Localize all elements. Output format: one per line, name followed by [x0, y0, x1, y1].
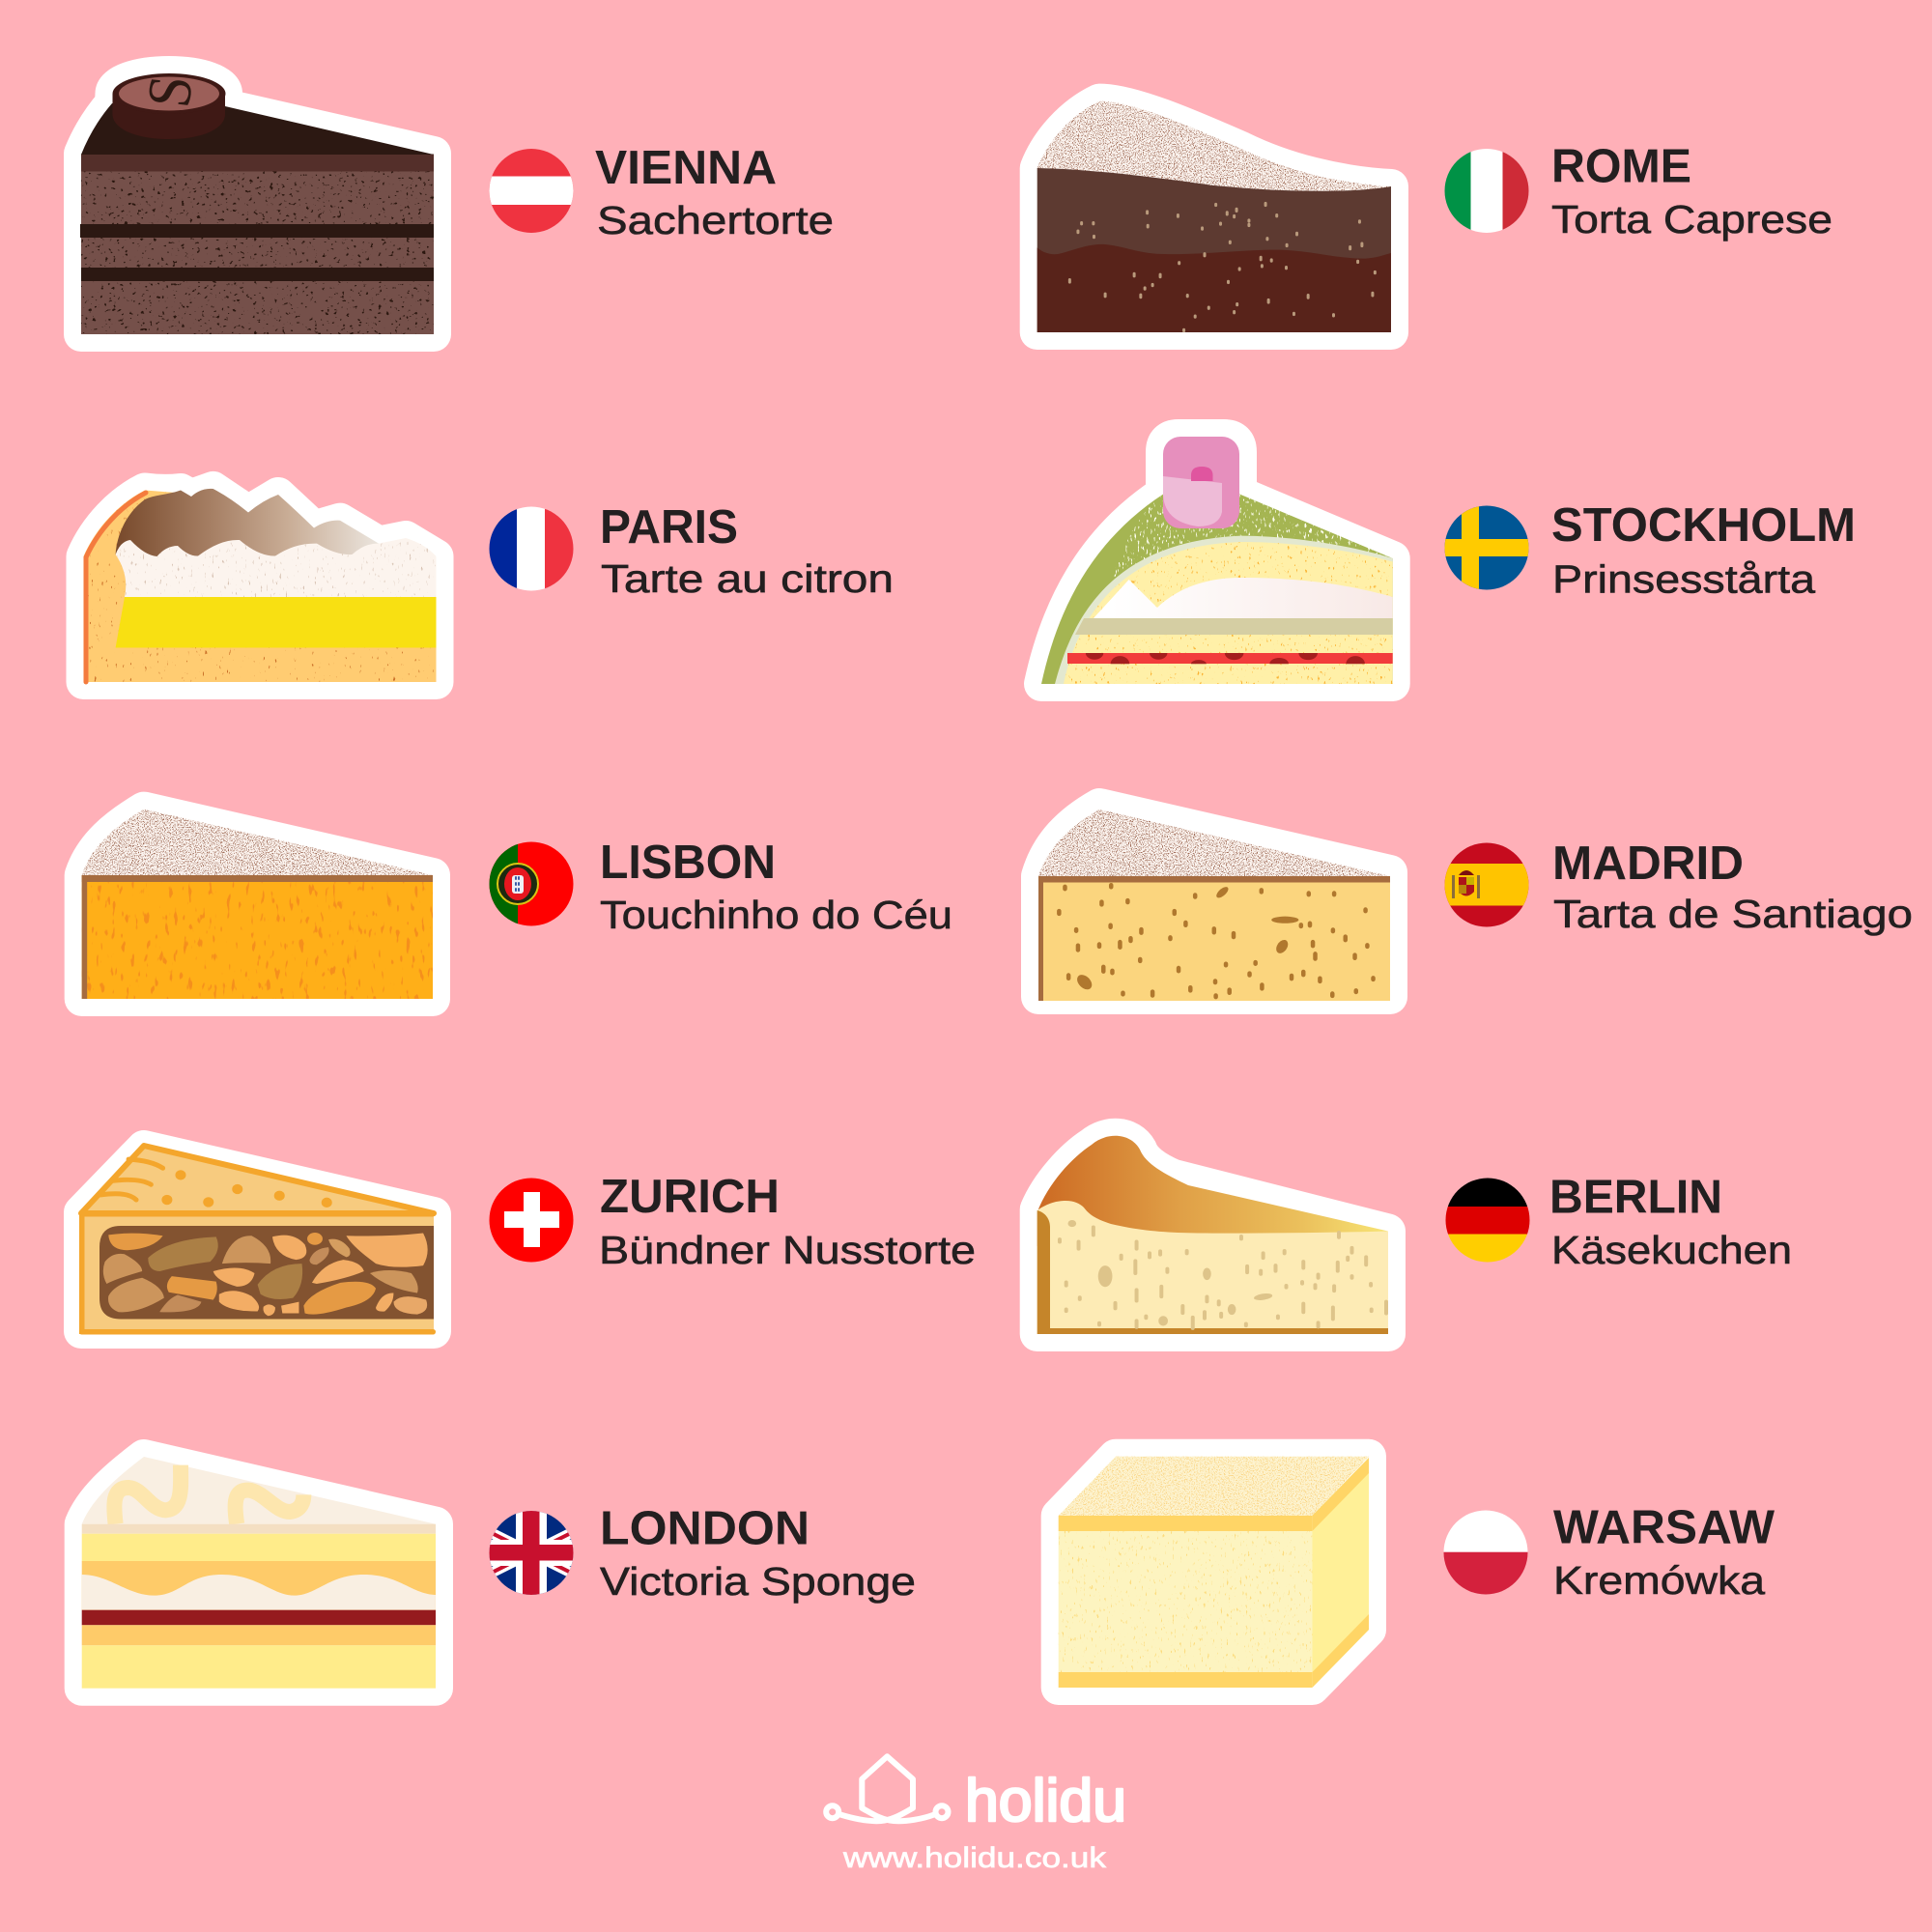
flag: United Kingdom: [489, 1511, 574, 1596]
flag: Switzerland: [489, 1178, 574, 1263]
cake name: Bündner Nusstorte: Bündner Nusstorte: [599, 1228, 976, 1272]
wordmark: holidu: [965, 1768, 1126, 1834]
panel: Paris: [83, 489, 894, 682]
heading: STOCKHOLM: STOCKHOLM: [1551, 499, 1856, 552]
flag: Portugal: [489, 841, 574, 926]
heading: LONDON: LONDON: [600, 1503, 810, 1555]
panel: Stockholm: [1041, 437, 1856, 684]
panel: Madrid: [1038, 806, 1913, 1001]
illustration: Touchinho do Céu slice: [82, 810, 433, 999]
flag: Sweden: [1444, 505, 1529, 590]
heading: ROME: ROME: [1551, 141, 1691, 193]
flag: Germany: [1445, 1178, 1530, 1264]
illustration: Käsekuchen slice: [1037, 1136, 1388, 1334]
heading: LISBON: LISBON: [600, 837, 776, 889]
panel: Berlin: [1037, 1136, 1792, 1334]
heading: BERLIN: BERLIN: [1549, 1171, 1722, 1223]
cake name: Torta Caprese: Torta Caprese: [1551, 197, 1833, 242]
panel: Zurich: [79, 1146, 976, 1335]
heading: MADRID: MADRID: [1552, 838, 1744, 890]
cake name: Victoria Sponge: Victoria Sponge: [600, 1559, 916, 1604]
illustration: Tarte au citron slice: [83, 489, 437, 682]
illustration: Sachertorte slice: S: [135, 72, 206, 110]
illustration: Victoria Sponge slice: [82, 1457, 436, 1689]
panel: Warsaw: [1059, 1457, 1776, 1688]
illustration: Tarta de Santiago slice: [1038, 806, 1390, 1001]
cake name: Kremówka: Kremówka: [1553, 1558, 1765, 1603]
cake name: Touchinho do Céu: Touchinho do Céu: [600, 893, 952, 937]
flag: Spain: [1444, 842, 1529, 927]
panel: Lisbon: [82, 810, 952, 999]
cake name: Käsekuchen: Käsekuchen: [1551, 1228, 1792, 1272]
website url: www.holidu.co.uk: [842, 1842, 1107, 1874]
illustration: Kremówka slice: [1059, 1457, 1369, 1688]
cake name: Sachertorte: Sachertorte: [597, 198, 834, 242]
illustration: Bündner Nusstorte slice: [79, 1146, 436, 1335]
panel: Vienna: [80, 72, 834, 334]
logo: holidu: [826, 1756, 1126, 1874]
panel: Rome: [1037, 101, 1833, 332]
illustration: Sachertorte slice: [80, 72, 434, 334]
cake name: Tarte au citron: Tarte au citron: [601, 556, 894, 601]
flag: Poland: [1443, 1510, 1528, 1595]
heading: ZURICH: ZURICH: [600, 1171, 780, 1223]
cake name: Prinsesstårta: Prinsesstårta: [1552, 556, 1815, 601]
icon: house and loop mark: [826, 1756, 949, 1821]
heading: PARIS: PARIS: [600, 501, 738, 554]
flag: France: [489, 506, 574, 591]
illustration: Prinsesstårta slice: [1041, 437, 1393, 684]
panel: London: [82, 1457, 916, 1689]
cake name: Tarta de Santiago: Tarta de Santiago: [1553, 892, 1913, 936]
heading: WARSAW: WARSAW: [1553, 1501, 1776, 1553]
heading: VIENNA: VIENNA: [595, 142, 777, 194]
flag: Austria: [489, 149, 574, 234]
illustration: Torta Caprese slice: [1037, 101, 1391, 332]
flag: Italy: [1444, 149, 1530, 234]
